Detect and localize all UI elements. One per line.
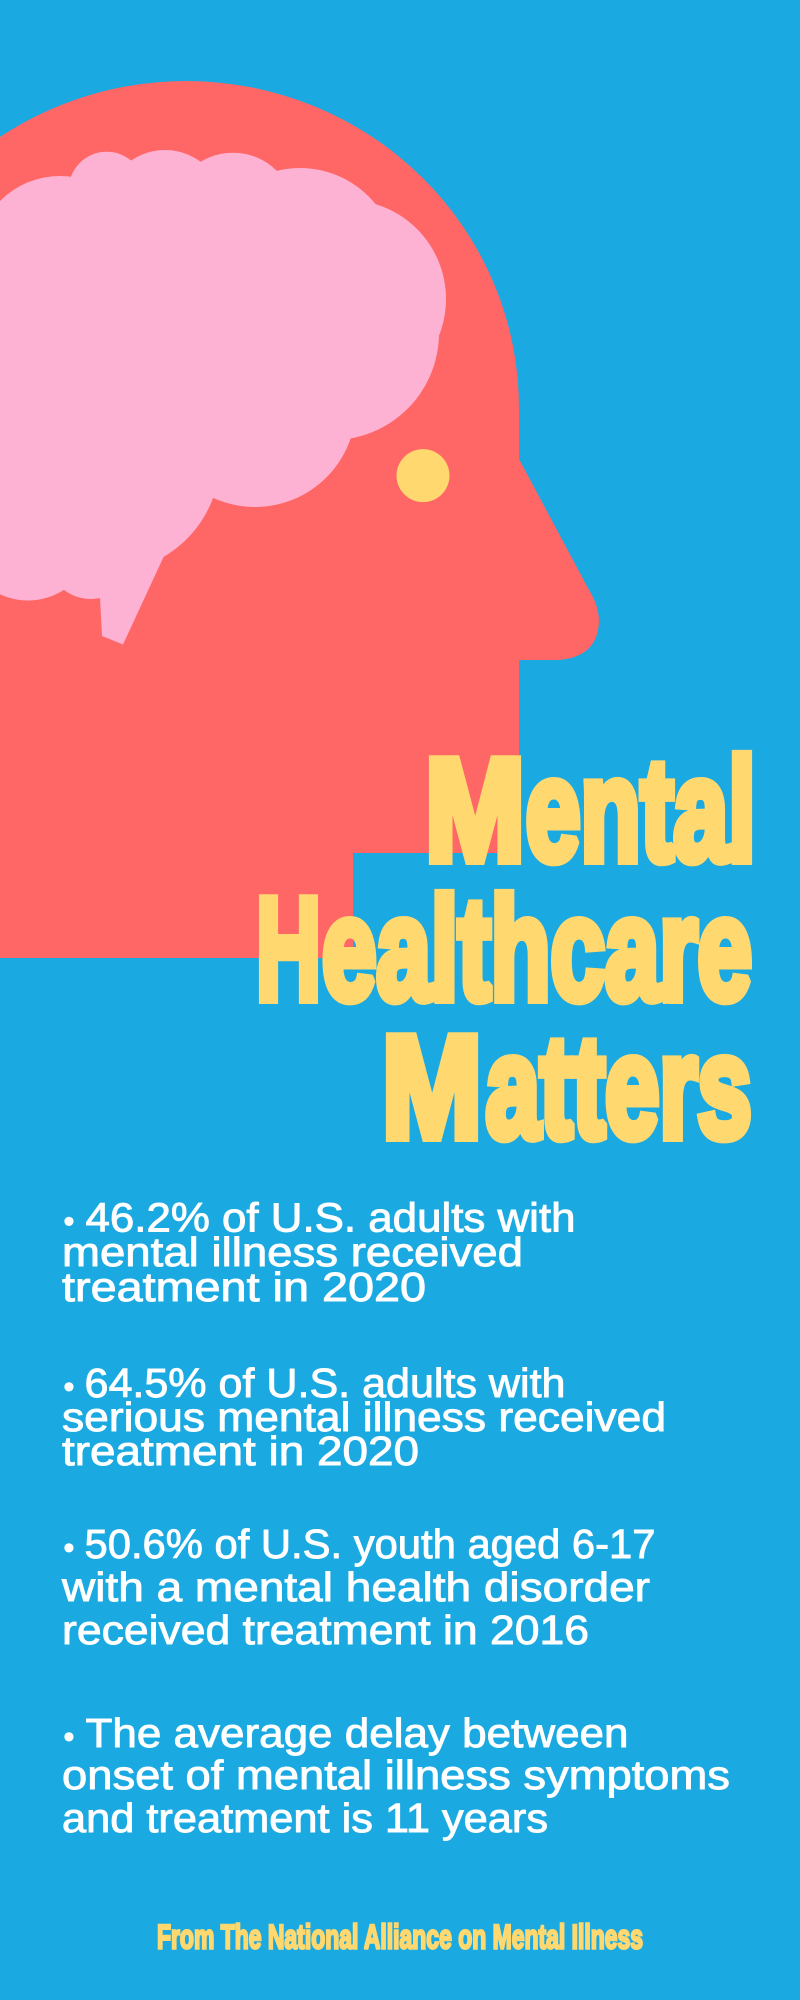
title xyxy=(256,729,756,1168)
stat: adults with serious mental illness: treatment in 2020 xyxy=(62,1428,419,1474)
stat: youth aged 6-17: • xyxy=(63,1529,75,1567)
title: M xyxy=(425,729,525,891)
head silhouette xyxy=(0,81,599,958)
stat: average delay xyxy=(62,1710,730,1841)
stat: adults with serious mental illness: 64.5% of U.S. adults with xyxy=(84,1360,566,1406)
stat: average delay: and treatment is 11 years xyxy=(62,1795,548,1841)
stat: adults with mental illness: • xyxy=(63,1203,75,1241)
stat: adults with serious mental illness: serious mental illness received xyxy=(62,1394,666,1440)
stat: average delay: • xyxy=(63,1718,75,1756)
stat: adults with mental illness: treatment in 2020 xyxy=(62,1264,426,1310)
stat: adults with serious mental illness: • xyxy=(63,1368,75,1406)
stat: youth aged 6-17: 50.6% of U.S. youth aged 6-17 xyxy=(84,1521,656,1567)
title: M xyxy=(382,1006,482,1168)
stat: average delay: onset of mental illness symptoms xyxy=(62,1752,730,1798)
stat: youth aged 6-17: with a mental health disorder xyxy=(61,1564,650,1610)
stat: adults with serious mental illness xyxy=(62,1360,666,1474)
stat: youth aged 6-17 xyxy=(61,1521,655,1653)
ear dot xyxy=(396,449,450,502)
stat: adults with mental illness: mental illness received xyxy=(62,1229,523,1275)
illustration: head with brain xyxy=(0,81,599,958)
stat: adults with mental illness xyxy=(62,1195,576,1310)
stat: youth aged 6-17: received treatment in 2016 xyxy=(62,1607,589,1653)
stat: average delay: The average delay between xyxy=(86,1710,628,1756)
stat: adults with mental illness: 46.2% of U.S. adults with xyxy=(86,1195,576,1241)
brain xyxy=(0,150,446,644)
title: H xyxy=(256,868,321,1030)
